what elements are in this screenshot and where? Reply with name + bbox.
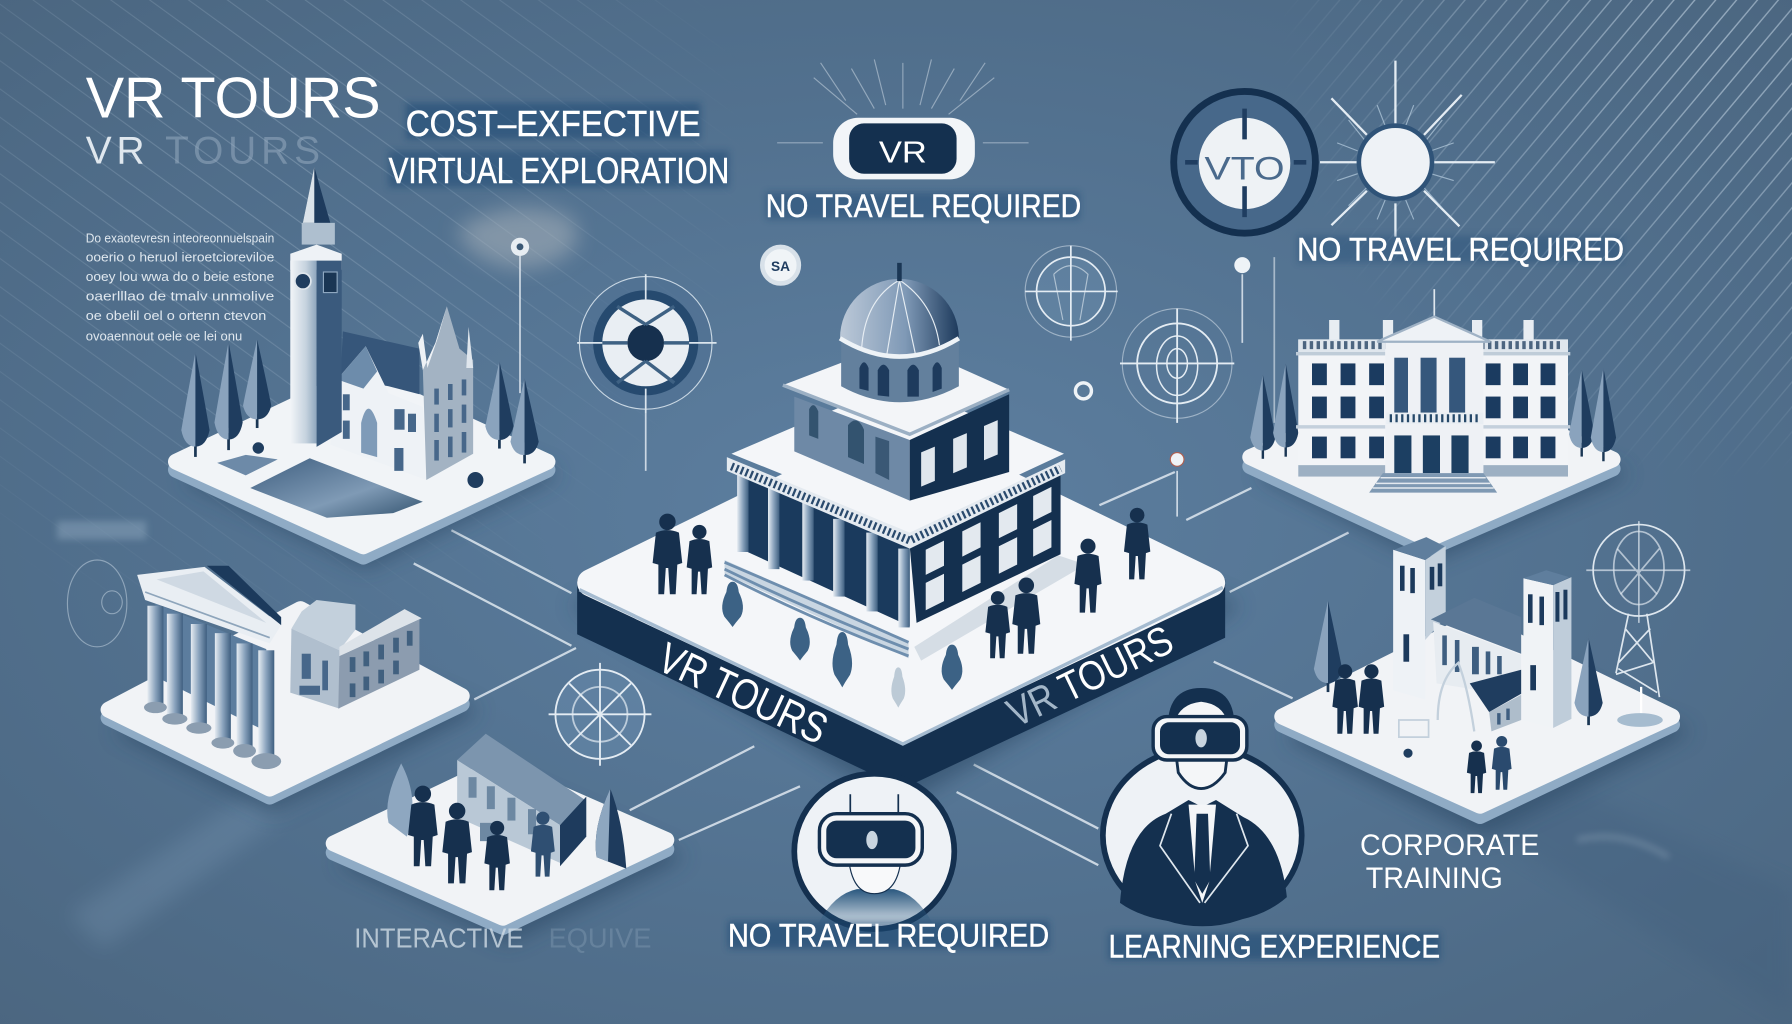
label: interactive [354, 922, 651, 953]
title: VR TOURS [86, 67, 381, 131]
icon: sunburst [1320, 61, 1495, 237]
small figures [722, 582, 962, 708]
VT label: VTO [1205, 150, 1285, 186]
text block: left description: ovoaennout oele oe lei onu [86, 329, 242, 344]
radio mast [1586, 521, 1690, 727]
platform side label: VR TOURS left: VR TOURS [651, 634, 835, 754]
pond [217, 455, 423, 518]
text block: left description [86, 230, 274, 344]
label: no travel required bottom: NO TRAVEL REQUIRED [728, 917, 1049, 953]
icon: small target bottom [549, 663, 651, 766]
side building [290, 600, 422, 709]
panel: bottom-right campus platform [1282, 521, 1690, 816]
platform base [577, 579, 1225, 789]
heading: cost-effective: VIRTUAL EXPLORATION [389, 150, 729, 191]
panel: central museum platform [577, 263, 1225, 789]
temple columns [137, 566, 281, 769]
panel: top-right mansion platform [1250, 289, 1616, 549]
icon: business person with VR headset [1103, 688, 1302, 923]
trees [181, 339, 539, 463]
label: interactive: INTERACTIVE [354, 922, 523, 953]
clock tower [290, 167, 342, 447]
visitors [653, 508, 1150, 658]
plaza building [457, 734, 586, 866]
icon: badge SA [762, 247, 799, 283]
trees [1250, 363, 1616, 461]
heading: cost-effective [389, 103, 729, 191]
label: interactive: EQUIVE [549, 922, 651, 953]
panel: left temple platform [109, 566, 462, 797]
label: learning experience: LEARNING EXPERIENCE [1109, 929, 1440, 965]
cone trees [387, 763, 626, 869]
icon: pins [511, 238, 1250, 466]
label: corporate training: CORPORATE [1360, 829, 1539, 862]
icon: target right [1120, 309, 1234, 423]
platform side label: VR TOURS right: VR TOURS [1000, 617, 1180, 736]
text block: left description: Do exaotevresn inteoreonnuelspain [86, 230, 274, 245]
heading: cost-effective: COST–EXFECTIVE [406, 103, 701, 144]
panel: top-left landmark platform [176, 167, 547, 557]
icon: compass badge VT [1174, 91, 1315, 233]
label: no travel required top right: NO TRAVEL REQUIRED [1297, 232, 1624, 268]
visitors [408, 786, 555, 890]
campus visitors [1332, 664, 1512, 793]
panel: bottom-left plaza platform [334, 734, 666, 927]
icon: target centre right [1025, 246, 1118, 341]
icon: visitor with VR headset [794, 774, 954, 929]
church [330, 306, 473, 480]
icon: target left [577, 274, 717, 414]
label: corporate training: TRAINING [1366, 862, 1503, 895]
platform shadows [114, 394, 1691, 943]
campus church and towers [1393, 537, 1571, 758]
text block: left description: oaerlllao de tmalv unmolive [86, 289, 274, 304]
ground figures [253, 442, 483, 488]
text block: left description: ooey lou wwa do o beie estone [86, 269, 274, 284]
icon: badge SA: SA [771, 259, 790, 274]
text block: left description: ooerio o heruol ieroetcioreviloe [86, 250, 274, 265]
title [86, 67, 381, 172]
connector lines [414, 256, 1349, 865]
icon: VR headset top [777, 59, 1029, 179]
mansion [1296, 289, 1570, 493]
VR label: VR [879, 134, 927, 169]
label: corporate training [1360, 829, 1539, 895]
museum building [725, 263, 1086, 661]
text block: left description: oe obelil oel o ortenn ctevon [86, 308, 266, 323]
label: no travel required top centre: NO TRAVEL REQUIRED [766, 188, 1081, 224]
title echo: VR TOURS [86, 129, 320, 172]
campus trees [1314, 601, 1603, 725]
